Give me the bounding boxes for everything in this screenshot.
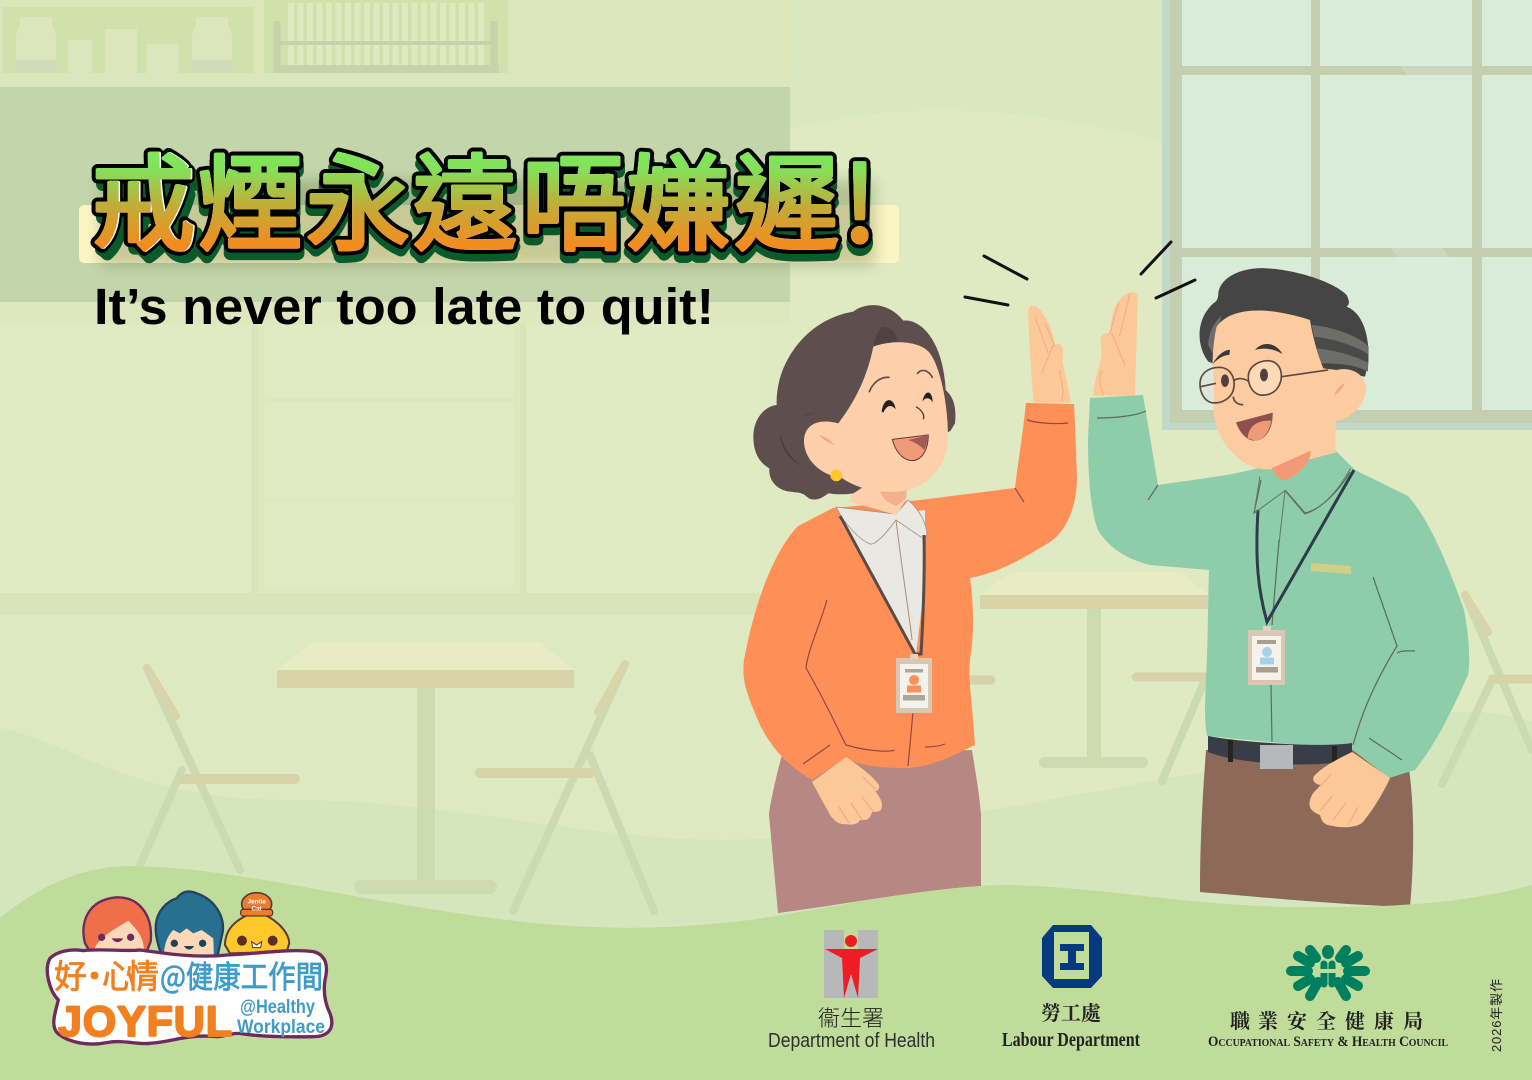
collar [1254, 468, 1351, 514]
icon: labour department emblem [1042, 925, 1102, 988]
lower cabinets [0, 302, 790, 615]
trousers [1200, 745, 1413, 907]
lanyard [1257, 470, 1354, 622]
logo banner [47, 950, 332, 1044]
icon: department of health emblem [824, 930, 878, 998]
mouth [1236, 413, 1273, 441]
logo: Labour Department: 勞工處 [1041, 997, 1101, 1026]
title backing bar [79, 180, 899, 266]
logo: Department of Health: 衞生署 [818, 1001, 884, 1033]
neck shadow [1272, 451, 1311, 481]
logo text: @健康工作間 [160, 952, 323, 997]
mascot: yellow cat [225, 893, 289, 953]
title: Chinese slogan: 戒煙永遠唔嫌遲! [91, 120, 877, 271]
cardigan [743, 403, 1077, 780]
hair [1200, 268, 1369, 377]
logo: Department of Health [768, 930, 935, 1052]
logo text: 好·心情 [54, 950, 159, 998]
mascot: girl [83, 897, 151, 955]
logo text: JOYFUL [58, 998, 232, 1046]
shirt and collar [840, 510, 925, 655]
logo: Department of Health: Department of Health [768, 1030, 935, 1052]
upper shelves [0, 0, 790, 87]
raised hand [1093, 292, 1138, 396]
shirt [1088, 395, 1469, 778]
skirt [769, 750, 981, 913]
window [1162, 0, 1532, 430]
lanyard [840, 516, 924, 654]
mascot: yellow cat: Jentle [247, 899, 266, 906]
logo text: @Healthy [240, 997, 315, 1018]
title: Chinese slogan: 戒煙永遠唔嫌遲! [92, 120, 877, 271]
glasses [1200, 368, 1214, 403]
logo: Occupational Safety and Health Council: OCCUPATIONAL SAFETY & HEALTH COUNCIL [1208, 1034, 1448, 1050]
mascot: boy [156, 892, 223, 960]
logo: Labour Department: Labour Department [1002, 1029, 1140, 1051]
dark counter band [0, 87, 790, 302]
logo: Occupational Safety and Health Council: 職業安全健康局 [1230, 1005, 1423, 1034]
raised hand [1028, 306, 1071, 403]
subtitle: English slogan: It’s never too late to quit! [94, 278, 714, 335]
logo: Joyful @ Healthy Workplace [47, 892, 332, 1046]
character: man in green shirt [1088, 268, 1469, 907]
breast pocket tag [1311, 563, 1351, 574]
head [753, 305, 955, 515]
belt [1208, 736, 1352, 764]
id card [1248, 626, 1285, 685]
logo: Labour Department [1002, 925, 1140, 1051]
furniture: table and chairs [140, 572, 1532, 911]
hand on waist [812, 757, 882, 825]
id card [896, 654, 932, 713]
clap motion lines [965, 242, 1195, 305]
title: Chinese slogan: 戒煙永遠唔嫌遲! [91, 120, 877, 271]
bottom green wave [0, 866, 1532, 1080]
production year note: 2026年製作 [1489, 979, 1504, 1052]
hand on waist [1309, 752, 1390, 827]
eyebrows [1213, 344, 1282, 364]
face [1212, 311, 1366, 469]
character: woman in orange cardigan [743, 305, 1077, 913]
mascot: yellow cat: Cat [252, 906, 263, 913]
icon: OSHC emblem [1291, 945, 1365, 996]
title: Chinese slogan: 戒煙永遠唔嫌遲! [96, 127, 877, 278]
logo text: Workplace [237, 1017, 325, 1038]
logo: Occupational Safety and Health Council [1208, 945, 1448, 1050]
logo text [54, 950, 325, 1046]
